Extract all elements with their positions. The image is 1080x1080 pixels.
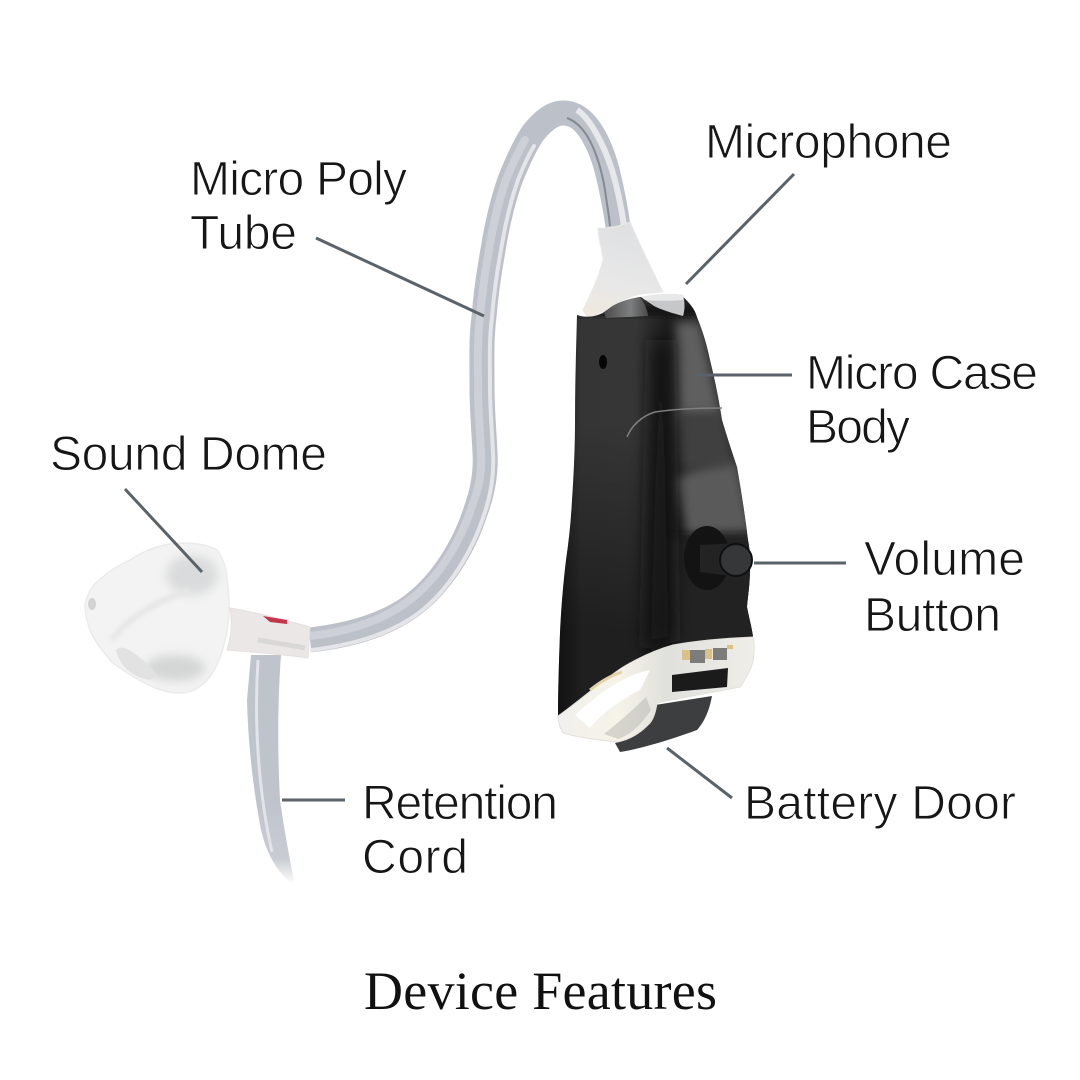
label: microphone: Microphone: [705, 116, 952, 169]
micro poly tube: [310, 110, 624, 650]
strip reflections: [575, 645, 733, 739]
label: micro poly tube: Micro Poly: [190, 153, 407, 206]
label: volume button: Button: [864, 589, 1001, 642]
battery door slot: [672, 668, 728, 692]
leader: volume button: [754, 562, 846, 564]
dome stem: [227, 608, 310, 658]
title: Device Features: [364, 961, 717, 1021]
battery door: [615, 696, 712, 752]
label: retention cord: Retention: [362, 777, 558, 830]
label: micro poly tube: Tube: [190, 207, 297, 260]
lower shading: [558, 479, 753, 715]
leader: sound dome: [125, 489, 202, 572]
dark lower section: [672, 534, 753, 644]
light strip: [558, 637, 754, 742]
tube connector: [583, 222, 663, 319]
label: volume button: [864, 533, 1025, 642]
label: retention cord: [362, 777, 558, 884]
leader: battery door: [667, 748, 732, 798]
case pinhole: [599, 355, 607, 369]
sound dome: [85, 543, 310, 693]
label: micro case body: Body: [806, 401, 910, 454]
label: battery door: Battery Door: [744, 777, 1016, 830]
label: sound dome: Sound Dome: [50, 428, 327, 481]
centre dark stripe: [645, 340, 674, 650]
top shading: [577, 306, 697, 316]
top bump: [604, 297, 648, 318]
retention cord: [247, 655, 294, 885]
leader: microphone: [686, 174, 794, 284]
leader lines: [125, 174, 846, 800]
device body: [550, 290, 760, 752]
leader: retention cord: [282, 798, 345, 802]
microphone grille: [641, 294, 684, 316]
label: retention cord: Cord: [362, 831, 468, 884]
band below seam: [676, 412, 735, 470]
label: micro poly tube: [190, 153, 407, 260]
label: micro case body: Micro Case: [806, 347, 1038, 400]
label: volume button: Volume: [864, 533, 1025, 586]
case seam: [627, 408, 722, 437]
leader: micro poly tube: [316, 238, 484, 316]
volume button: [684, 526, 752, 590]
lower highlight panel: [676, 462, 752, 534]
label: micro case body: [806, 347, 1038, 454]
upper highlight panel: [676, 322, 722, 420]
leader: micro case body: [694, 374, 792, 376]
